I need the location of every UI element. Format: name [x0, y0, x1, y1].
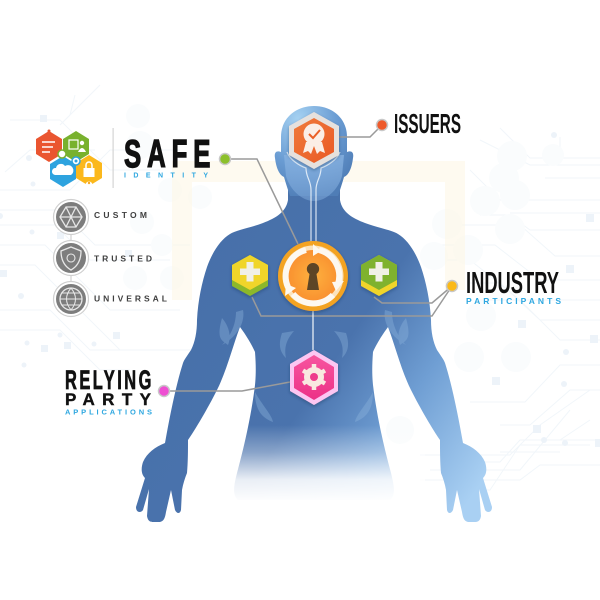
logo: safe identity [36, 128, 216, 188]
label: relying party applications: RELYING [65, 365, 154, 395]
lower torso fade [205, 425, 425, 503]
feature: custom: CUSTOM [94, 210, 147, 220]
logo hexagon: document [36, 131, 62, 162]
icon: issuers badge hexagon [289, 112, 339, 169]
icon: central keyhole seal [278, 241, 348, 311]
label: relying party applications: PARTY [65, 390, 152, 409]
background: circuit pattern [0, 85, 600, 490]
label: relying party applications: APPLICATIONS [65, 408, 152, 416]
face shade [284, 155, 344, 201]
label: issuers: ISSUERS [394, 108, 461, 139]
human body figure [136, 106, 492, 522]
icon: relying party gear hexagon [290, 350, 338, 405]
label: industry participants: PARTICIPANTS [466, 296, 561, 306]
logo hexagon: user [63, 131, 89, 162]
feature: trusted: TRUSTED [94, 254, 152, 264]
head [275, 106, 353, 196]
seal arrows [286, 250, 339, 303]
connector stem [312, 311, 314, 350]
label: industry participants [466, 265, 561, 306]
background: pale frame [172, 161, 465, 300]
logo wordmark: SAFE [124, 133, 216, 176]
icon: keyhole [307, 263, 319, 290]
label: relying party applications [65, 365, 154, 416]
connector lines [164, 125, 452, 391]
logo divider [112, 128, 114, 188]
logo hexagon: cloud [50, 156, 76, 187]
logo tagline: IDENTITY [124, 172, 208, 180]
logo hexagon: lock [76, 155, 102, 186]
body silhouette [136, 180, 492, 522]
connector dots [158, 120, 458, 396]
feature: universal: UNIVERSAL [94, 294, 167, 304]
icon: right plus hexagon [361, 255, 397, 296]
neural lines [287, 152, 340, 244]
icon: left plus hexagon [232, 255, 268, 296]
feature list [54, 200, 167, 316]
muscle highlights [220, 310, 408, 422]
